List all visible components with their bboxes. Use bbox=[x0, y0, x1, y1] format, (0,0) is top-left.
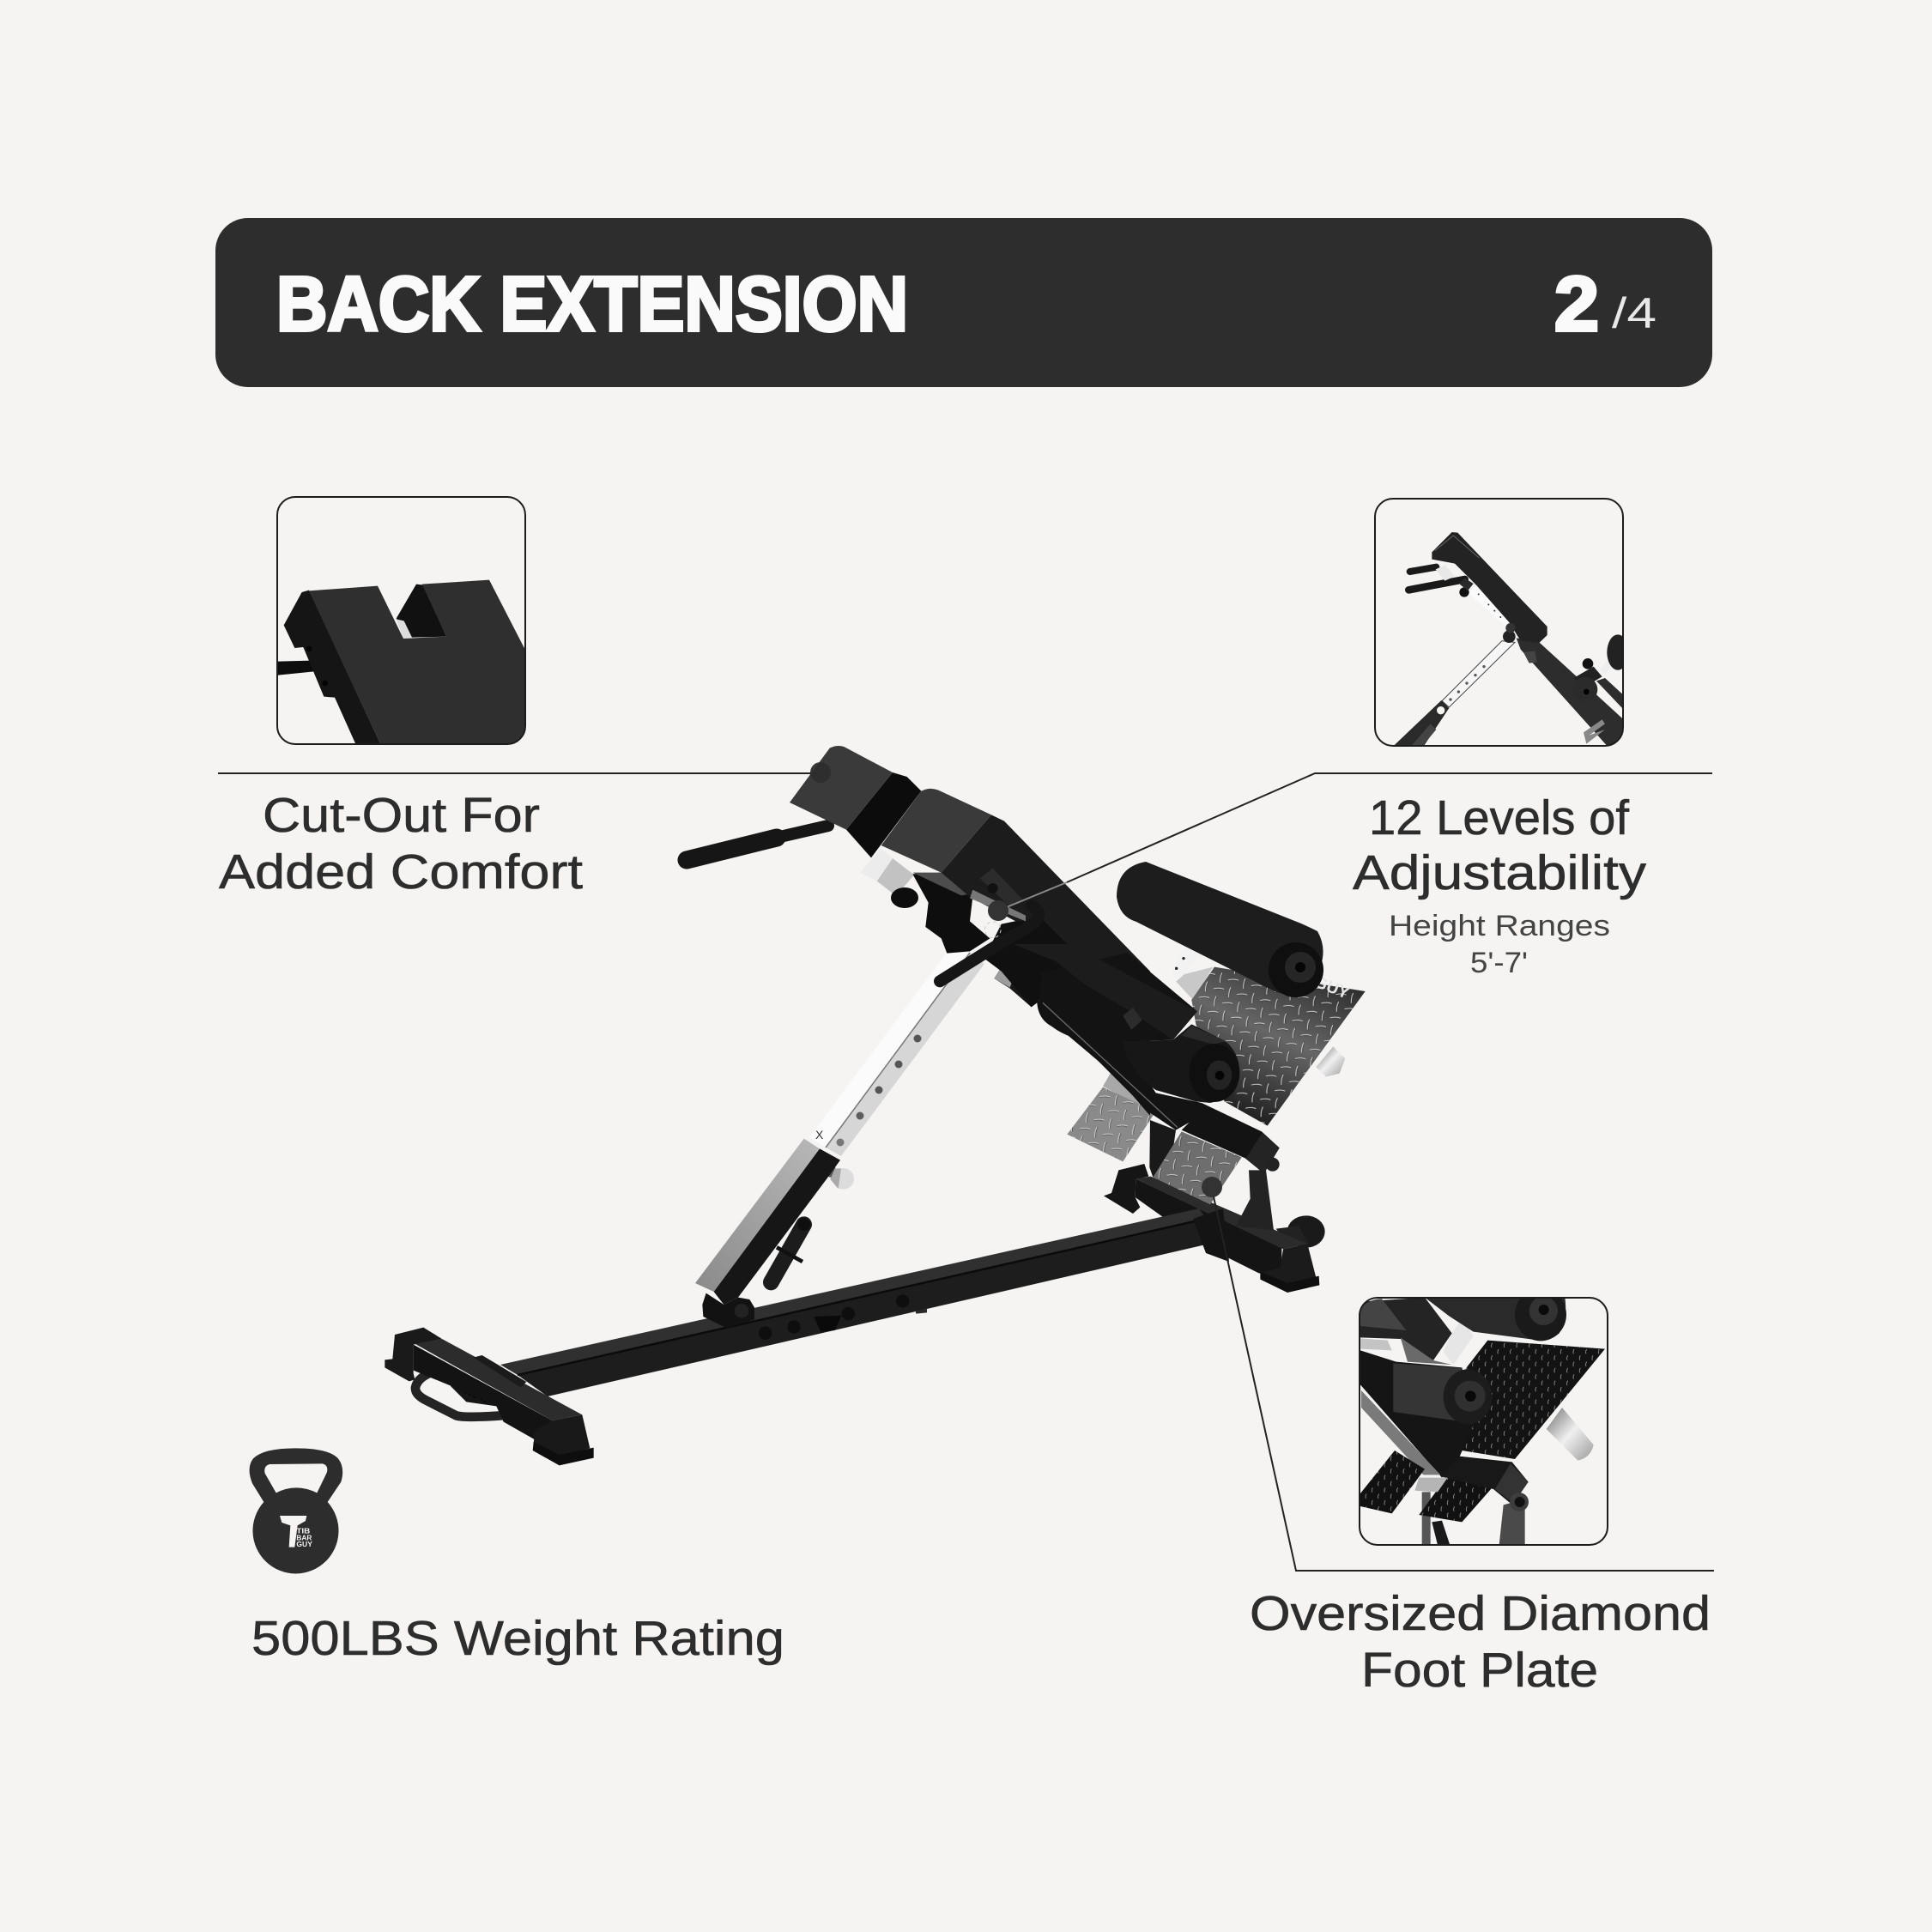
label: foot plate: Oversized Diamond bbox=[1250, 1586, 1711, 1641]
bracket under pad bbox=[912, 873, 990, 954]
pull pin bbox=[815, 1165, 854, 1190]
bench: adjustment post bbox=[809, 953, 984, 1156]
thumbnail: adjustability bbox=[1375, 499, 1629, 747]
height range note: 5'-7' bbox=[1470, 947, 1528, 979]
recess bbox=[980, 869, 1024, 907]
lower block bbox=[994, 967, 1040, 1007]
bench: rear foot and handle bbox=[385, 1328, 594, 1465]
wheel bbox=[1287, 1215, 1325, 1248]
label: foot plate: Foot Plate bbox=[1361, 1643, 1598, 1698]
front foot left bbox=[1104, 1164, 1148, 1214]
head pad side bbox=[846, 772, 921, 857]
bench: adjustment post: X bbox=[815, 1128, 824, 1142]
label: weight rating: 500LBS Weight Rating bbox=[251, 1611, 784, 1666]
logo mark bbox=[280, 1516, 313, 1548]
logo mark: GUY bbox=[296, 1541, 313, 1548]
back upright bbox=[1149, 1120, 1176, 1178]
bench: upper frame and pads bbox=[790, 746, 1150, 1116]
front roller bbox=[1123, 1024, 1239, 1103]
sleeve bbox=[695, 1139, 840, 1305]
header bar bbox=[215, 218, 1712, 387]
callout: cut-out line bbox=[218, 772, 820, 774]
strap bbox=[1058, 977, 1142, 1034]
callout dot: adjustment bbox=[988, 900, 1008, 921]
height range note: Height Ranges bbox=[1389, 910, 1610, 942]
rear plate bbox=[451, 1369, 496, 1406]
label: cut-out for added comfort: Added Comfort bbox=[219, 845, 583, 899]
logo mark: BAR bbox=[296, 1534, 312, 1541]
callout: foot plate line bbox=[1213, 1193, 1714, 1571]
rear foot left bbox=[385, 1328, 442, 1381]
right foot plate bbox=[1153, 1131, 1242, 1204]
main pad side bbox=[942, 815, 1150, 1013]
front upright bbox=[1236, 1170, 1274, 1230]
front bracket bbox=[1182, 1103, 1280, 1173]
label: foot plate bbox=[1250, 1586, 1711, 1698]
label: cut-out for added comfort bbox=[219, 788, 583, 899]
head pad face bbox=[790, 746, 893, 830]
front foot right bbox=[1261, 1244, 1316, 1285]
knob bbox=[891, 887, 918, 908]
logo mark: TIB bbox=[296, 1528, 311, 1535]
main pad face bbox=[881, 789, 991, 873]
bench: rear grip bbox=[687, 826, 828, 860]
collar bbox=[984, 922, 1001, 938]
bench: lower frame, front roller, small plate, bracket bbox=[1013, 944, 1280, 1204]
bench: rear foot and handle: NIDE V2 bbox=[460, 1384, 490, 1405]
callout dot: foot plate bbox=[1202, 1177, 1222, 1197]
white block bbox=[860, 848, 914, 896]
crossbar bbox=[414, 1345, 552, 1440]
bolts bbox=[759, 1327, 772, 1340]
icon: kettlebell bbox=[250, 1448, 342, 1573]
silver tube bbox=[1172, 944, 1213, 1000]
thumbnail: diamond plate bbox=[1360, 1288, 1608, 1545]
step counter: 2 bbox=[1554, 262, 1599, 348]
step counter bbox=[1554, 262, 1656, 348]
label: cut-out for added comfort: Cut-Out For bbox=[263, 788, 540, 843]
bench: strut, lever, hinge and bolts bbox=[695, 1139, 927, 1340]
pull pin behind plate bbox=[1316, 1046, 1345, 1077]
side handle bbox=[940, 905, 1039, 981]
label: 12 levels of adjustability: Adjustability bbox=[1353, 845, 1647, 900]
bench: left foot plate, back plate, roller bbox=[1067, 944, 1366, 1230]
hinge bbox=[702, 1293, 754, 1328]
handle bbox=[415, 1370, 513, 1417]
under body bbox=[984, 916, 1150, 1116]
silver bar bbox=[970, 890, 1026, 921]
bench: back roller bbox=[1117, 862, 1323, 997]
large diamond plate: GUY bbox=[1311, 972, 1352, 1003]
lever bbox=[771, 1218, 810, 1282]
left foot plate bbox=[1067, 1071, 1156, 1161]
label: 12 levels of adjustability bbox=[1353, 790, 1647, 979]
callout: adjustability line bbox=[998, 773, 1712, 911]
step counter: /4 bbox=[1612, 289, 1656, 337]
callout dot: pad bbox=[810, 762, 831, 783]
cross tube bbox=[1136, 1178, 1281, 1276]
bench: base beam bbox=[500, 1208, 1229, 1396]
height range note bbox=[1389, 910, 1610, 979]
label: 12 levels of adjustability: 12 Levels of bbox=[1369, 790, 1629, 845]
large diamond plate bbox=[1191, 967, 1366, 1126]
title: BACK EXTENSION bbox=[276, 262, 908, 348]
bench: front base crossbar and wheel bbox=[1104, 1164, 1325, 1293]
thumbnail: cut-out pad bbox=[277, 497, 525, 745]
rear foot right bbox=[534, 1414, 590, 1457]
pad end and frame bbox=[1013, 944, 1202, 1130]
